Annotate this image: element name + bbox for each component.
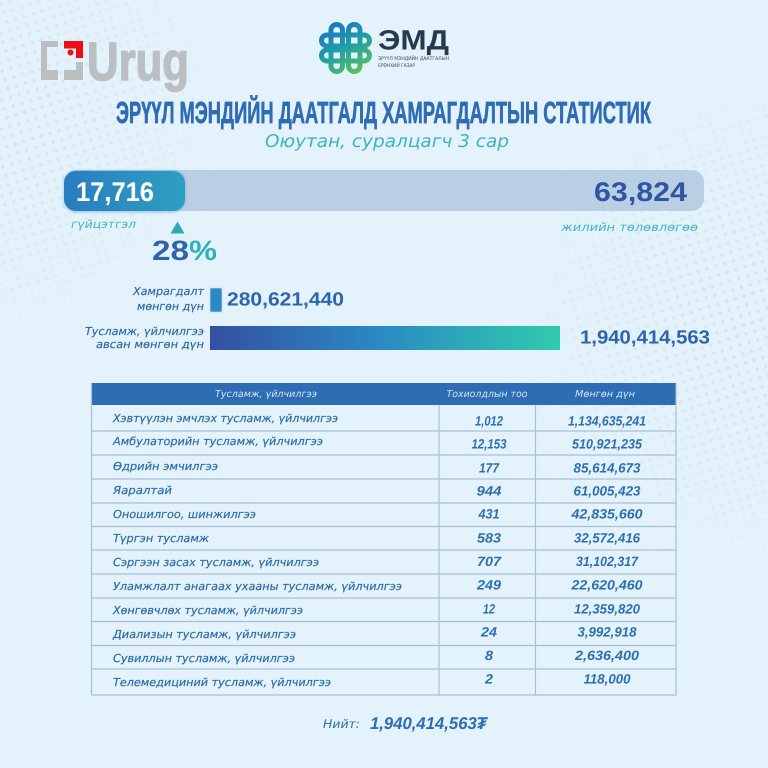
- row: dialysis: [112, 624, 637, 641]
- logo: Urug: Urug: [87, 32, 189, 92]
- total: 1,940,414,563₮: [370, 714, 489, 733]
- bar: services amount: [210, 326, 560, 350]
- label: coverage amount: Хамрагдалт: [132, 285, 205, 298]
- row: dialysis: Диализын тусламж, үйлчилгээ: [112, 628, 296, 641]
- row: palliative: 12,359,820: [574, 602, 640, 616]
- value: coverage amount: 280,621,440: [227, 290, 344, 310]
- row: nursing: [113, 648, 640, 665]
- row: nursing: 8: [485, 648, 494, 663]
- label: coverage amount: мөнгөн дүн: [137, 300, 204, 313]
- subtitle: Оюутан, суралцагч 3 сар: [265, 132, 509, 152]
- row: nursing: 2,636,400: [574, 648, 640, 663]
- row: rehabilitation: 31,102,317: [576, 554, 639, 569]
- row: telemedicine: 118,000: [584, 672, 631, 686]
- row: palliative: Хөнгөвчлөх тусламж, үйлчилгээ: [112, 604, 303, 617]
- value: performance: 17,716: [76, 177, 154, 207]
- row: rehabilitation: 707: [477, 554, 503, 569]
- row: telemedicine: Телемедициний тусламж, үйлчилгээ: [113, 676, 331, 689]
- row: diagnostics: 431: [478, 506, 500, 522]
- row: day treatment: Өдрийн эмчилгээ: [113, 460, 218, 473]
- row: telemedicine: 2: [484, 672, 494, 686]
- label: services amount: [85, 325, 204, 351]
- row: ambulance: Түргэн тусламж: [113, 532, 209, 545]
- row: ambulance: 32,572,416: [574, 530, 640, 546]
- row: emergency: 61,005,423: [574, 484, 641, 498]
- label: performance: гүйцэтгэл: [71, 217, 137, 231]
- table header: [92, 383, 676, 405]
- row: outpatient: [112, 435, 642, 452]
- row: dialysis: 24: [480, 624, 498, 640]
- table: services: [92, 383, 676, 695]
- table header: Мөнгөн дүн: [575, 389, 635, 400]
- percent 28%: 28: [152, 235, 189, 266]
- agency name: ЭРҮҮЛ МЭНДИЙН ДААТГАЛЫН: [378, 55, 449, 62]
- agency name: [378, 55, 449, 69]
- wordmark: ЭМД: [378, 24, 449, 56]
- row: emergency: 944: [476, 484, 502, 498]
- row: outpatient: Амбулаторийн тусламж, үйлчилгээ: [112, 435, 323, 448]
- icon: knot emblem: [322, 24, 370, 72]
- row: diagnostics: [113, 506, 643, 522]
- row: palliative: 12: [483, 602, 495, 616]
- bar chart: amounts: [85, 285, 710, 351]
- bar fill shadow: [64, 171, 185, 212]
- label: annual plan: жилийн төлөвлөгөө: [560, 220, 698, 234]
- row: emergency: [112, 484, 641, 498]
- bar track: [64, 170, 704, 211]
- row: rehabilitation: Сэргээн засах тусламж, үйлчилгээ: [113, 556, 319, 569]
- agency name: ЕРӨНХИЙ ГАЗАР: [378, 62, 415, 69]
- row: traditional medicine: 249: [476, 578, 502, 592]
- table header: Тохиолдлын тоо: [446, 389, 528, 400]
- row: ambulance: [113, 530, 640, 546]
- row: rehabilitation: [113, 554, 639, 569]
- percent 28%: [152, 235, 217, 266]
- label: coverage amount: [132, 285, 205, 313]
- table header: Тусламж, үйлчилгээ: [215, 389, 317, 400]
- logo: EMD health insurance: [322, 24, 449, 72]
- row: diagnostics: 42,835,660: [570, 506, 643, 522]
- row: day treatment: 85,614,673: [574, 460, 641, 476]
- percent 28%: %: [189, 235, 217, 266]
- row: traditional medicine: [113, 578, 643, 593]
- value: services amount: 1,940,414,563: [580, 328, 710, 348]
- row: nursing: Сувиллын тусламж, үйлчилгээ: [113, 652, 295, 665]
- row: palliative: [112, 602, 640, 617]
- row: ambulance: 583: [477, 530, 502, 546]
- row: diagnostics: Оношилгоо, шинжилгээ: [113, 508, 256, 521]
- row: traditional medicine: Уламжлалт анагаах ухааны тусламж, үйлчилгээ: [113, 580, 402, 593]
- row: emergency: Яаралтай: [112, 484, 172, 497]
- label: services amount: Тусламж, үйлчилгээ: [85, 325, 204, 338]
- value: annual plan: 63,824: [594, 177, 687, 207]
- progress bar: plan vs performance: [64, 170, 704, 212]
- label: services amount: авсан мөнгөн дүн: [96, 338, 204, 351]
- row: inpatient: 1,134,635,241: [568, 414, 646, 428]
- row: day treatment: 177: [479, 460, 500, 476]
- row: inpatient: Хэвтүүлэн эмчлэх тусламж, үйлчилгээ: [112, 412, 338, 425]
- row: outpatient: 510,921,235: [572, 436, 642, 452]
- icon: up triangle: [170, 222, 184, 234]
- row: outpatient: 12,153: [472, 436, 507, 452]
- row: inpatient: 1,012: [475, 414, 503, 428]
- logo: Urug: [41, 32, 189, 92]
- bar fill: [64, 171, 185, 211]
- total: Нийт:: [323, 717, 360, 731]
- row: day treatment: [113, 460, 641, 476]
- row: telemedicine: [113, 672, 631, 689]
- row: traditional medicine: 22,620,460: [570, 578, 643, 592]
- row: inpatient: [112, 412, 646, 428]
- row: dialysis: 3,992,918: [578, 624, 637, 640]
- bar: coverage amount: [210, 288, 222, 312]
